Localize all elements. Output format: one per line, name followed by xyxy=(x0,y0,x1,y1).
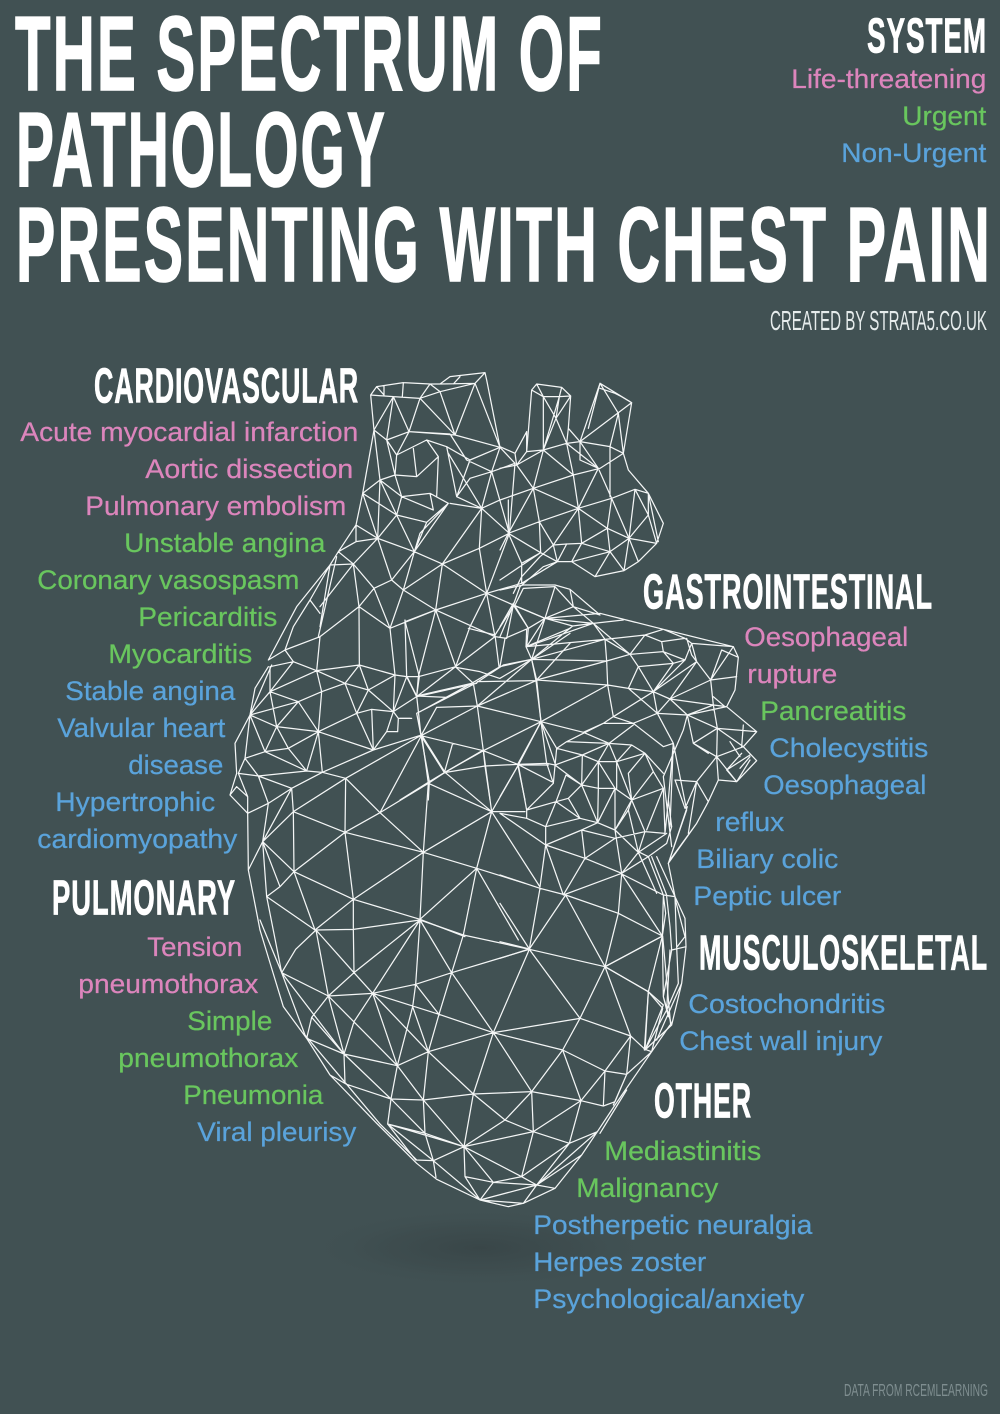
list: pulmonary conditions: Pneumonia xyxy=(183,1080,324,1110)
wireframe heart illustration xyxy=(230,373,757,1207)
list: cardiovascular conditions: cardiomyopathy xyxy=(37,824,238,854)
list: gastrointestinal conditions: Oesophageal xyxy=(744,622,908,652)
list: cardiovascular conditions xyxy=(20,417,358,854)
legend: system severity key: Life-threatening xyxy=(791,64,986,94)
list: gastrointestinal conditions: reflux xyxy=(715,807,784,837)
list: gastrointestinal conditions: Pancreatitis xyxy=(760,696,906,726)
list: other conditions: Malignancy xyxy=(576,1173,719,1203)
list: cardiovascular conditions: Hypertrophic xyxy=(55,787,215,817)
list: gastrointestinal conditions: Peptic ulcer xyxy=(693,881,841,911)
list: gastrointestinal conditions: rupture xyxy=(747,659,837,689)
title: PATHOLOGY xyxy=(16,91,387,209)
list: pulmonary conditions: pneumothorax xyxy=(78,969,258,999)
panel: other xyxy=(533,1074,813,1314)
list: gastrointestinal conditions: Oesophageal xyxy=(763,770,926,800)
heading: pulmonary: PULMONARY xyxy=(52,870,236,926)
list: pulmonary conditions: pneumothorax xyxy=(118,1043,298,1073)
list: other conditions xyxy=(533,1136,813,1314)
list: pulmonary conditions xyxy=(78,932,357,1147)
list: musculoskeletal conditions xyxy=(679,989,885,1056)
panel: gastrointestinal xyxy=(643,564,933,911)
list: other conditions: Postherpetic neuralgia xyxy=(533,1210,813,1240)
list: cardiovascular conditions: Valvular heart xyxy=(57,713,226,743)
panel: pulmonary xyxy=(52,870,357,1147)
list: musculoskeletal conditions: Chest wall injury xyxy=(679,1026,883,1056)
heart shadow xyxy=(305,1208,655,1288)
list: cardiovascular conditions: Coronary vasospasm xyxy=(37,565,299,595)
list: gastrointestinal conditions xyxy=(693,622,928,911)
list: cardiovascular conditions: Stable angina xyxy=(65,676,236,706)
legend: system severity key: Non-Urgent xyxy=(841,138,987,168)
list: gastrointestinal conditions: Cholecystitis xyxy=(769,733,928,763)
list: other conditions: Mediastinitis xyxy=(604,1136,761,1166)
legend: system severity key xyxy=(791,8,987,168)
title xyxy=(15,0,992,304)
list: pulmonary conditions: Simple xyxy=(187,1006,272,1036)
list: cardiovascular conditions: disease xyxy=(128,750,223,780)
list: cardiovascular conditions: Pulmonary embolism xyxy=(85,491,346,521)
list: cardiovascular conditions: Aortic dissection xyxy=(145,454,353,484)
legend: system severity key: Urgent xyxy=(902,101,987,131)
list: other conditions: Herpes zoster xyxy=(533,1247,706,1277)
heading: other: OTHER xyxy=(654,1074,752,1128)
heading: cardiovascular: CARDIOVASCULAR xyxy=(94,358,359,414)
list: musculoskeletal conditions: Costochondritis xyxy=(688,989,885,1019)
list: pulmonary conditions: Tension xyxy=(147,932,242,962)
list: other conditions: Psychological/anxiety xyxy=(533,1284,805,1314)
list: cardiovascular conditions: Pericarditis xyxy=(138,602,277,632)
list: cardiovascular conditions: Unstable angina xyxy=(124,528,326,558)
panel: musculoskeletal xyxy=(679,926,988,1056)
list: pulmonary conditions: Viral pleurisy xyxy=(197,1117,357,1147)
list: gastrointestinal conditions: Biliary colic xyxy=(696,844,838,874)
panel: cardiovascular xyxy=(20,358,359,854)
list: cardiovascular conditions: Acute myocardial infarction xyxy=(20,417,358,447)
list: cardiovascular conditions: Myocarditis xyxy=(108,639,252,669)
